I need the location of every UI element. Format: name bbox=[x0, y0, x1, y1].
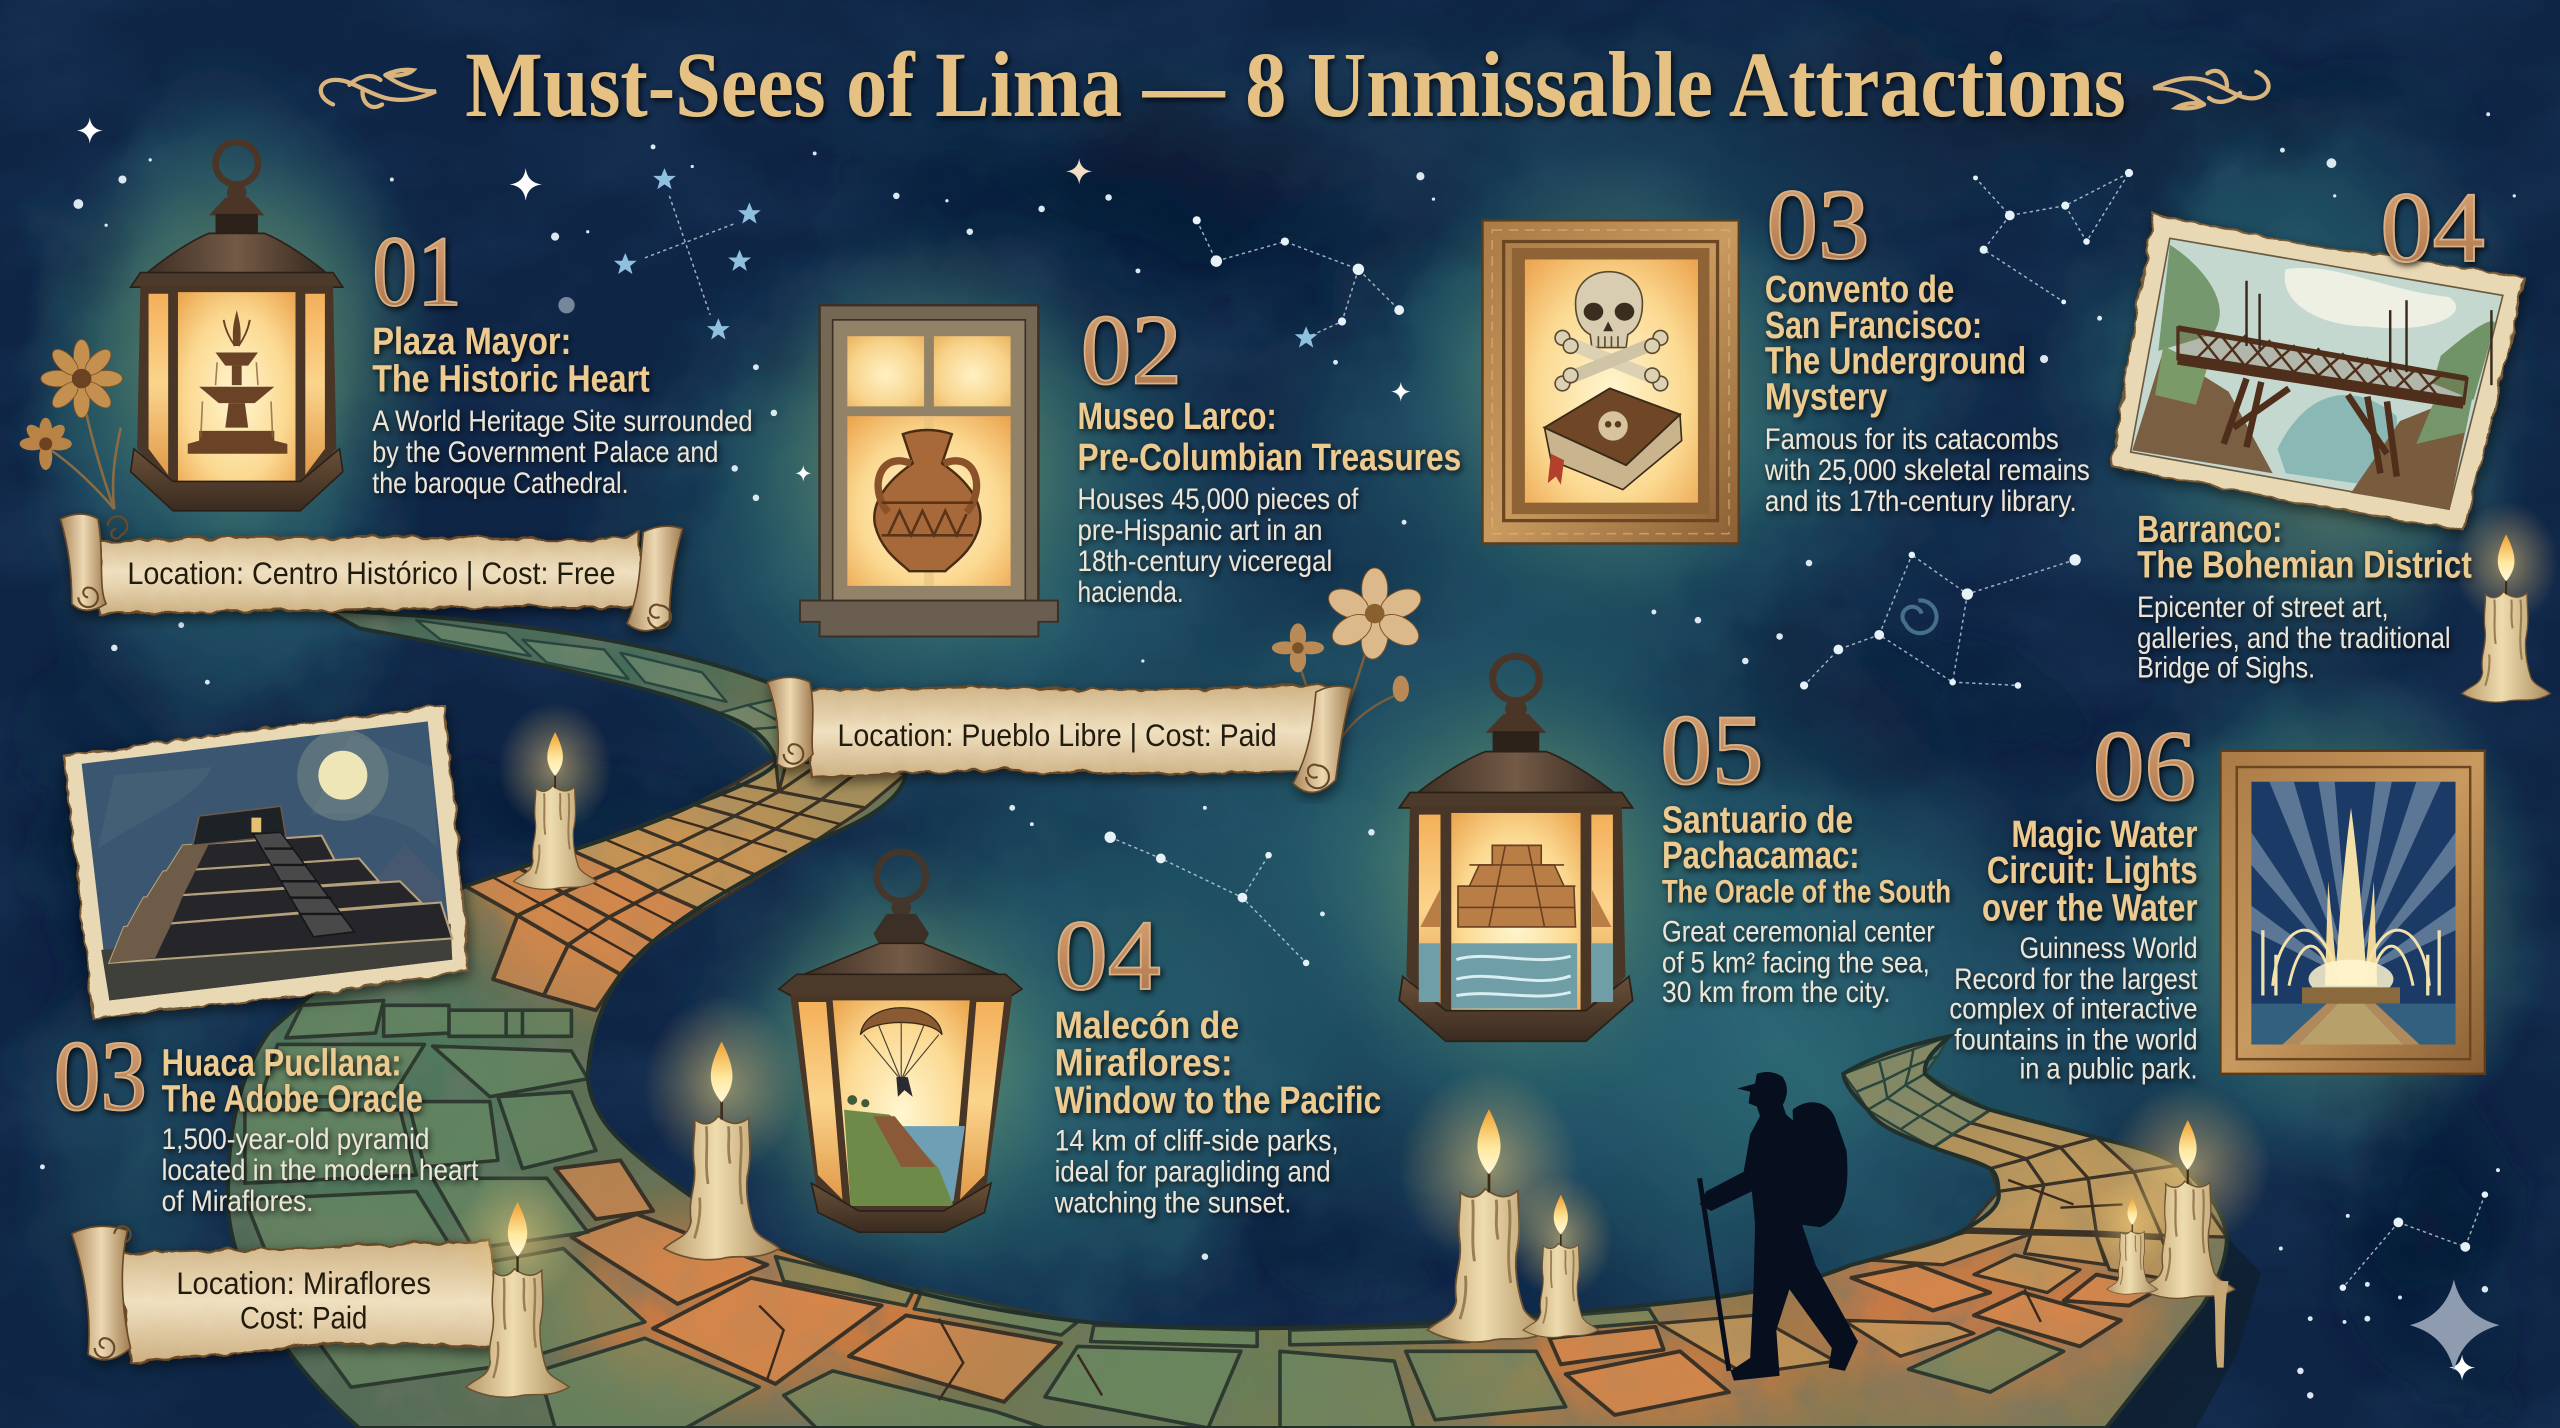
icon: framed fountain bbox=[2220, 751, 2485, 1074]
description: Record for the largest bbox=[1954, 963, 2198, 996]
description: complex of interactive bbox=[1949, 992, 2198, 1025]
description: 14 km of cliff-side parks, bbox=[1055, 1125, 1339, 1158]
heading: The Bohemian District bbox=[2137, 544, 2472, 586]
description: with 25,000 skeletal remains bbox=[1764, 454, 2090, 487]
heading: Circuit: Lights bbox=[1987, 849, 2198, 891]
candle right of road bbox=[2108, 1085, 2271, 1368]
description: A World Heritage Site surrounded bbox=[372, 405, 753, 438]
panel: 02 Museo Larco bbox=[767, 294, 1461, 792]
heading bbox=[372, 320, 650, 400]
heading: Window to the Pacific bbox=[1055, 1079, 1381, 1121]
hiker silhouette bbox=[1700, 1072, 1858, 1381]
description bbox=[372, 405, 753, 500]
paraglider bbox=[860, 1008, 942, 1097]
description: Bridge of Sighs. bbox=[2137, 651, 2315, 684]
description: Epicenter of street art, bbox=[2137, 591, 2389, 624]
green cobbles bbox=[245, 1000, 2064, 1428]
description bbox=[2137, 591, 2451, 684]
description: pre-Hispanic art in an bbox=[1078, 514, 1322, 547]
icon: framed skull and book bbox=[1482, 220, 1739, 543]
description: by the Government Palace and bbox=[372, 436, 718, 469]
heading: Miraflores: bbox=[1055, 1041, 1233, 1083]
icon: photo of bridge bbox=[2113, 214, 2524, 530]
scroll: location and cost bbox=[767, 677, 1352, 792]
description: of Miraflores. bbox=[162, 1185, 313, 1218]
description: located in the modern heart bbox=[162, 1154, 478, 1187]
title bbox=[321, 34, 2269, 137]
icon: flowers left of lantern bbox=[20, 339, 122, 509]
heading bbox=[162, 1041, 423, 1119]
scroll: location and cost: Location: Pueblo Libre | Cost: Paid bbox=[838, 717, 1277, 753]
crossbones bbox=[1555, 330, 1668, 391]
heading: Santuario de bbox=[1662, 798, 1853, 840]
scroll: location and cost: Location: Miraflores bbox=[176, 1265, 431, 1301]
description bbox=[1662, 916, 1935, 1009]
heading: over the Water bbox=[1982, 886, 2198, 928]
description: watching the sunset. bbox=[1054, 1187, 1291, 1220]
orange cobbles bbox=[465, 850, 2162, 1415]
number 03: 03 bbox=[1767, 168, 1869, 280]
description: in a public park. bbox=[2020, 1053, 2198, 1086]
heading: Plaza Mayor: bbox=[372, 320, 571, 362]
description: hacienda. bbox=[1078, 576, 1184, 609]
scroll: location and cost bbox=[72, 1226, 506, 1363]
icon: photo of pyramid bbox=[64, 705, 469, 1018]
heading bbox=[1982, 813, 2198, 928]
heading: The Underground bbox=[1765, 340, 2026, 382]
description: 18th-century viceregal bbox=[1078, 545, 1332, 578]
heading bbox=[2137, 508, 2472, 586]
scroll: location and cost bbox=[60, 514, 682, 631]
panel: Huaca Pucllana bbox=[54, 705, 506, 1363]
skull bbox=[1576, 272, 1642, 348]
number 04: 04 bbox=[2380, 171, 2485, 283]
book bbox=[1544, 388, 1682, 490]
panel: Malecón de Miraflores bbox=[779, 852, 1381, 1232]
title text: Must-Sees of Lima — 8 Unmissable Attractions bbox=[465, 34, 2126, 137]
panel: 03 Convento de San Francisco bbox=[1482, 168, 2090, 543]
short candle at bottom bbox=[1509, 1175, 1613, 1337]
description bbox=[1949, 932, 2198, 1086]
number 02: 02 bbox=[1081, 294, 1182, 406]
icon: flowers by scroll bbox=[1272, 568, 1426, 751]
heading: Convento de bbox=[1765, 268, 1954, 310]
heading: Barranco: bbox=[2137, 508, 2282, 550]
panel: 04 Barranco bbox=[2113, 171, 2558, 702]
heading bbox=[1765, 268, 2026, 418]
scroll: location and cost: Cost: Paid bbox=[240, 1299, 367, 1335]
heading: Malecón de bbox=[1055, 1004, 1239, 1046]
description: Guinness World bbox=[2020, 932, 2198, 965]
panel: 06 Magic Water Circuit bbox=[1949, 710, 2485, 1086]
heading: The Adobe Oracle bbox=[162, 1077, 423, 1119]
description: Houses 45,000 pieces of bbox=[1078, 483, 1359, 516]
icon: lantern with fountain bbox=[131, 142, 343, 511]
description: galleries, and the traditional bbox=[2137, 622, 2451, 655]
tan cobbles bbox=[571, 759, 2227, 1374]
icon: candle bbox=[2454, 501, 2558, 702]
candles along the road bbox=[456, 702, 2271, 1397]
description: Great ceremonial center bbox=[1662, 916, 1935, 949]
description: fountains in the world bbox=[1954, 1023, 2198, 1056]
constellations bbox=[614, 168, 2488, 1291]
description: ideal for paragliding and bbox=[1055, 1156, 1331, 1189]
candle by scroll bbox=[456, 1172, 580, 1397]
description bbox=[1764, 423, 2090, 518]
small candle right of road bbox=[2090, 1178, 2175, 1294]
cliff and sea bbox=[844, 1095, 965, 1206]
panel: 05 Santuario de Pachacamac bbox=[1399, 656, 1951, 1041]
description bbox=[1054, 1125, 1339, 1220]
icon: four-point sparkle bbox=[2410, 1279, 2500, 1371]
winding cobblestone road bbox=[228, 610, 2261, 1428]
description: 30 km from the city. bbox=[1662, 976, 1891, 1009]
title ornament right bbox=[2153, 71, 2269, 108]
description: 1,500-year-old pyramid bbox=[162, 1123, 429, 1156]
number 01: 01 bbox=[372, 215, 462, 327]
heading: Mystery bbox=[1765, 376, 1887, 418]
description: of 5 km² facing the sea, bbox=[1662, 947, 1930, 980]
heading: Magic Water bbox=[2011, 813, 2198, 855]
title ornament left bbox=[321, 70, 436, 107]
description: Famous for its catacombs bbox=[1765, 423, 2059, 456]
icon: lantern with pyramid bbox=[1399, 656, 1633, 1041]
tall candle at bottom bbox=[1399, 1069, 1579, 1342]
heading bbox=[1662, 798, 1951, 909]
number 06: 06 bbox=[2093, 710, 2196, 822]
vase bbox=[874, 430, 980, 571]
candle on middle road bbox=[643, 996, 800, 1260]
icon: tapered lantern with paraglider bbox=[779, 852, 1022, 1232]
heading bbox=[1078, 395, 1461, 478]
far path stones bbox=[416, 620, 1990, 1147]
heading: San Francisco: bbox=[1765, 304, 1982, 346]
description: the baroque Cathedral. bbox=[372, 467, 629, 500]
icon: window with vase bbox=[800, 305, 1058, 636]
heading bbox=[1055, 1004, 1381, 1121]
scroll: location and cost: Location: Centro Histórico | Cost: Free bbox=[127, 555, 616, 591]
description bbox=[162, 1123, 478, 1218]
heading: The Historic Heart bbox=[372, 358, 650, 400]
heading: The Oracle of the South bbox=[1662, 873, 1951, 909]
heading: Pre-Columbian Treasures bbox=[1078, 436, 1461, 478]
description: and its 17th-century library. bbox=[1765, 485, 2077, 518]
number 03: 03 bbox=[54, 1020, 147, 1132]
heading: Museo Larco: bbox=[1078, 395, 1277, 437]
clouds and hills bbox=[2132, 245, 2495, 509]
heading: Pachacamac: bbox=[1662, 834, 1860, 876]
panel: 01 Plaza Mayor bbox=[20, 142, 753, 631]
heading: Huaca Pucllana: bbox=[162, 1041, 402, 1083]
candle on upper road bbox=[498, 702, 612, 889]
description bbox=[1078, 483, 1359, 609]
pyramid bbox=[109, 806, 452, 963]
brick joints and cracks bbox=[491, 793, 2122, 1400]
number 05: 05 bbox=[1660, 693, 1763, 805]
number 04: 04 bbox=[1055, 899, 1161, 1011]
moon bbox=[297, 730, 389, 821]
bridge bbox=[2178, 281, 2491, 477]
